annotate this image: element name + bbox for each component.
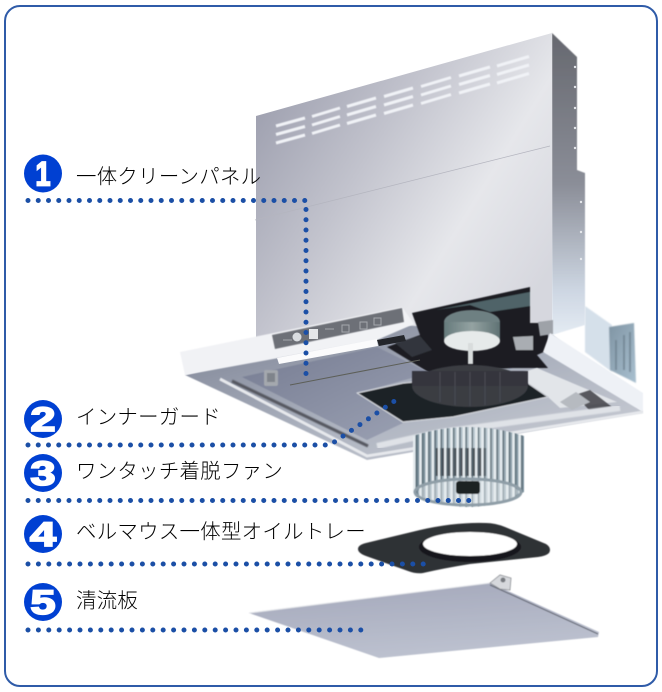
cavity with fan housing <box>387 287 548 373</box>
leader line 2 <box>28 400 396 445</box>
fan blades <box>412 426 522 508</box>
item 1 number badge: 1 <box>36 156 50 194</box>
item 3 number badge <box>24 454 62 493</box>
front white strip <box>180 307 414 375</box>
control panel <box>272 308 404 349</box>
illustration: sirocco fan <box>413 427 524 507</box>
fan lower ring <box>415 479 521 505</box>
item 2 number badge: 2 <box>30 401 56 439</box>
item 5 number badge: 5 <box>30 584 56 622</box>
item 3 label: ワンタッチ着脱ファン <box>76 460 283 483</box>
fan bottom interior <box>418 480 518 504</box>
item 1 label: 一体クリーンパネル <box>76 166 261 188</box>
item 4 number badge <box>24 515 62 554</box>
latch <box>264 370 278 386</box>
fan hub <box>456 481 480 494</box>
right white strip <box>543 333 643 412</box>
panel seam <box>255 146 550 220</box>
item 1 number badge <box>24 154 62 194</box>
motor <box>444 310 500 364</box>
leader line 1 <box>28 200 306 376</box>
illustration: oil tray <box>358 523 550 573</box>
leader line 5 <box>28 628 365 632</box>
hood side duct <box>552 33 585 335</box>
silver right plate <box>513 368 617 408</box>
side duct holes <box>574 66 582 260</box>
plate tab <box>490 575 511 590</box>
leader line 4 <box>28 562 428 566</box>
item 3 number badge: 3 <box>30 455 56 493</box>
item 4 label: ベルマウス一体型オイルトレー <box>76 520 366 544</box>
item 4 number badge: 4 <box>30 516 56 554</box>
right corner silver detail <box>538 320 612 411</box>
illustration: flow plate <box>249 575 599 658</box>
item 2 label: インナーガード <box>76 406 221 429</box>
leader line 3 <box>28 498 477 503</box>
fan dark interior <box>436 448 486 476</box>
slot highlight <box>277 339 378 364</box>
lower front lip <box>220 379 643 456</box>
fan disc <box>412 365 528 407</box>
inner plate <box>242 347 430 440</box>
louvres <box>276 56 529 143</box>
inner guard window <box>357 373 548 422</box>
item 5 label: 清流板 <box>76 590 138 612</box>
item 5 number badge <box>24 583 62 622</box>
hood side bracket plate <box>585 306 636 383</box>
hood front panel <box>256 33 552 345</box>
item 2 number badge <box>24 400 62 439</box>
illustration: range hood <box>180 33 643 460</box>
hood underside frame <box>185 325 643 460</box>
